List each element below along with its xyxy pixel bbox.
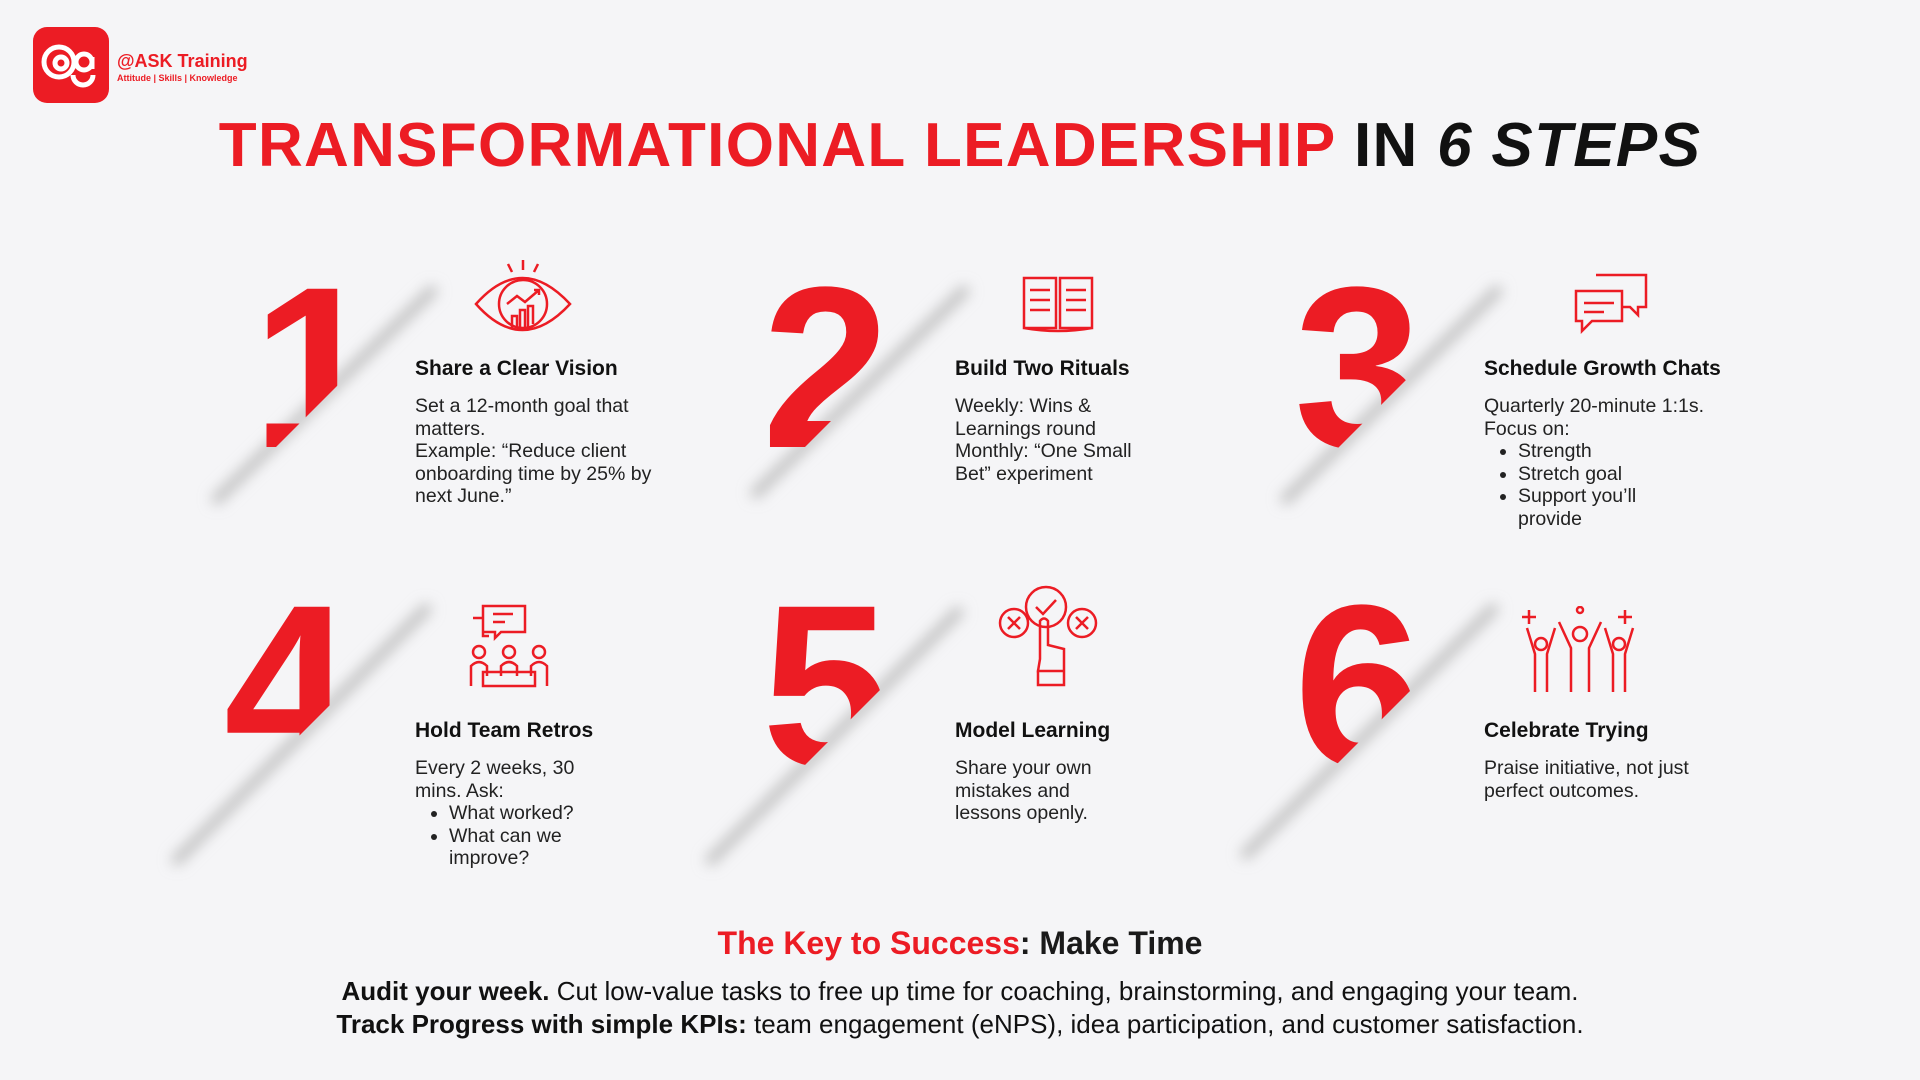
key to success text: Track Progress with simple KPIs: team engagement (eNPS), idea participation, and customer satisfaction. — [336, 1009, 1584, 1039]
step 6: Praise initiative, not just perfect outcomes. — [1484, 757, 1689, 802]
number 1: 1 — [252, 239, 380, 496]
step 1 — [415, 357, 652, 507]
key to success text — [336, 976, 1584, 1039]
step 6 — [1484, 719, 1689, 802]
step 5: Model Learning — [955, 719, 1110, 742]
icon: celebration — [1522, 606, 1634, 692]
step 1: Share a Clear Vision — [415, 357, 618, 380]
step 4: Hold Team Retros — [415, 719, 593, 742]
number 4: 4 — [224, 557, 352, 814]
step 3: Stretch goal — [1518, 463, 1622, 485]
title: TRANSFORMATIONAL LEADERSHIP IN 6 STEPS — [219, 111, 1701, 180]
logo text — [117, 51, 248, 83]
icon: eye with chart — [474, 260, 572, 332]
icon: team retro — [470, 604, 548, 688]
step 2: Weekly: Wins & Learnings round — [955, 395, 1096, 440]
step 1: Set a 12-month goal that matters. — [415, 395, 629, 440]
step 2: Build Two Rituals — [955, 357, 1130, 380]
numbers with fold shadows — [168, 282, 1506, 869]
step 3: Quarterly 20-minute 1:1s. — [1484, 395, 1704, 417]
step 4: What worked? — [449, 802, 574, 824]
key to success heading: The Key to Success: Make Time — [718, 925, 1202, 961]
step 2 — [955, 357, 1132, 485]
step 5 — [955, 719, 1110, 824]
key to success text: Audit your week. Cut low-value tasks to free up time for coaching, brainstorming, and engaging your team. — [341, 976, 1579, 1006]
step 3: Strength — [1518, 440, 1592, 462]
logo mark — [33, 27, 109, 103]
step 5: Share your own mistakes and lessons openly. — [955, 757, 1092, 824]
step 3: Support you’ll provide — [1518, 485, 1636, 530]
step 4 — [415, 719, 593, 869]
number 3: 3 — [1294, 239, 1422, 496]
step 1: Example: “Reduce client onboarding time by 25% by next June.” — [415, 440, 651, 507]
number 6: 6 — [1294, 557, 1422, 814]
icon: hand with choices — [998, 586, 1098, 686]
step 6: Celebrate Trying — [1484, 719, 1649, 742]
logo text: Attitude | Skills | Knowledge — [117, 73, 238, 83]
step 3: Schedule Growth Chats — [1484, 357, 1721, 380]
icon: chat bubbles — [1574, 274, 1648, 334]
number 5: 5 — [762, 557, 890, 814]
step 4: Every 2 weeks, 30 mins. Ask: — [415, 757, 574, 802]
step 4: What can we improve? — [449, 825, 562, 869]
number 2: 2 — [762, 239, 890, 496]
step 3: Focus on: — [1484, 418, 1570, 440]
logo — [33, 27, 248, 103]
step 2: Monthly: “One Small Bet” experiment — [955, 440, 1132, 485]
step 3 — [1484, 357, 1721, 530]
logo text: @ASK Training — [117, 51, 248, 71]
icon: book — [1022, 276, 1094, 332]
